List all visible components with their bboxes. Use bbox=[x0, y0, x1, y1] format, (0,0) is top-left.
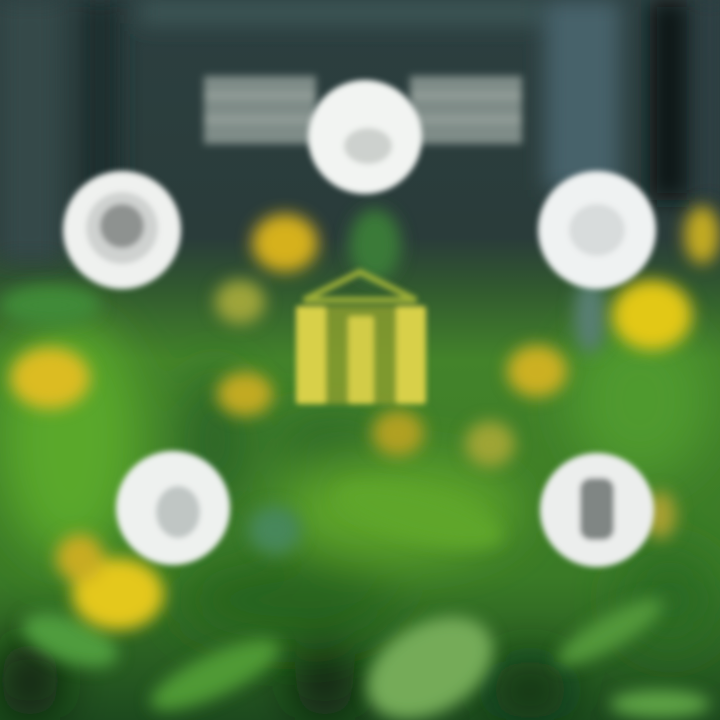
icon circle: lower right bbox=[540, 453, 654, 567]
icon circle: lower left bbox=[116, 451, 230, 565]
heading: blurred title left bbox=[204, 76, 316, 144]
central icon: yellow building with columns bbox=[296, 272, 426, 404]
heading: blurred title right bbox=[410, 76, 522, 144]
yellow flowers bbox=[10, 206, 720, 630]
icon circle: upper left bbox=[63, 171, 181, 289]
icon circle: upper right bbox=[538, 171, 656, 289]
icon circle: top centre bbox=[308, 80, 422, 194]
